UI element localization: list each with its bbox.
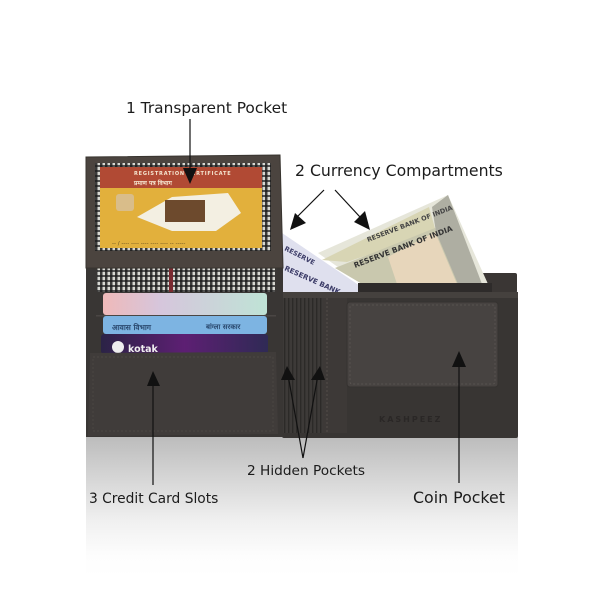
- note: green banknote: RESERVE BANK OF INDIA: [366, 204, 454, 244]
- registration card: प्रमाण पत्र विभाग: [133, 179, 172, 187]
- heading: 1 Transparent Pocket: 1 Transparent Pocket: [126, 99, 287, 117]
- registration card: [100, 167, 262, 248]
- heading: 2 Hidden Pockets: 2 Hidden Pockets: [247, 463, 365, 479]
- registration card: -- / ---- ---- ---- ---- ---- -- -----: [112, 241, 185, 247]
- wallet back panel: [470, 273, 517, 293]
- card: kotak: [101, 334, 268, 355]
- coin pocket lower: [348, 384, 496, 434]
- heading: 3 Credit Card Slots: 3 Credit Card Slots: [89, 491, 218, 507]
- arrows: currency compartments: [290, 190, 370, 230]
- note: purple banknote: [282, 233, 369, 296]
- hidden pocket ribs: [282, 298, 323, 433]
- card: blue: बांग्ला सरकार: [205, 323, 242, 331]
- panel: left wallet lower: [86, 268, 283, 437]
- currency notes: [282, 195, 488, 296]
- plaid lining: [97, 268, 275, 292]
- card: blue: [103, 316, 267, 334]
- panel: transparent pocket flap: [86, 155, 283, 268]
- brand mark: KASHPEEZ: [379, 415, 442, 424]
- card: blue: आवास विभाग: [112, 323, 152, 332]
- heading: Coin Pocket: Coin Pocket: [413, 488, 505, 507]
- heading: 2 Currency Compartments: 2 Currency Compartments: [295, 161, 503, 180]
- note: green banknote: [318, 195, 488, 284]
- wallet reflection: [86, 437, 518, 577]
- card: kotak: kotak: [128, 344, 159, 355]
- note: green banknote: RESERVE BANK OF INDIA: [352, 224, 454, 270]
- card pocket: [88, 352, 278, 436]
- arrow: credit card slots: [147, 371, 160, 485]
- panel: right wallet body: [282, 283, 518, 438]
- arrows: hidden pockets: [281, 366, 325, 458]
- note: purple banknote: RESERVE: [283, 245, 316, 267]
- registration card: REGISTRATION CERTIFICATE: [134, 171, 231, 177]
- card: pink: [103, 293, 267, 315]
- arrow: coin pocket: [452, 351, 466, 483]
- note: purple banknote: RESERVE BANK: [283, 265, 342, 296]
- arrow: transparent pocket: [183, 119, 197, 184]
- coin pocket flap: [347, 302, 498, 387]
